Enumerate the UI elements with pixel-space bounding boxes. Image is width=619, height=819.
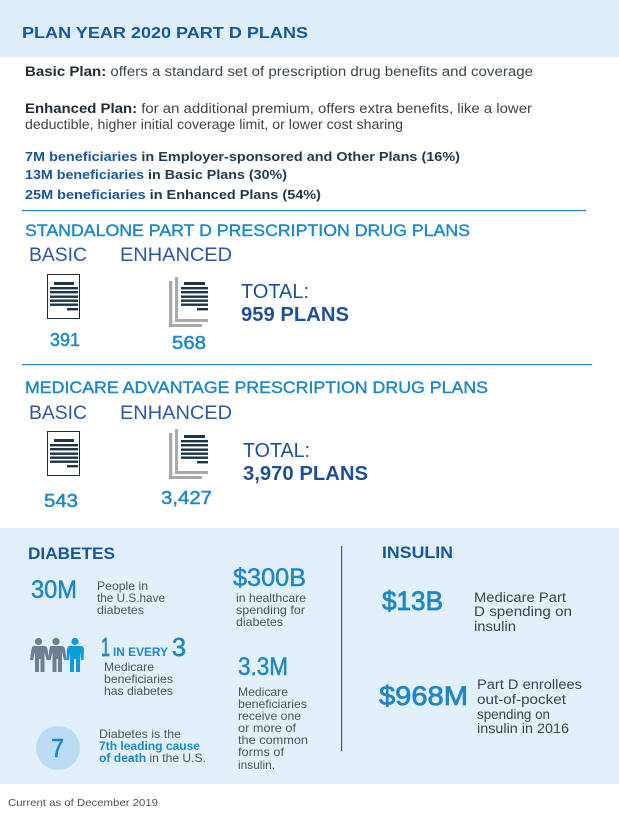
stat: 30M: 30M (31, 576, 77, 604)
text block: leading cause of death: Diabetes is the (99, 727, 181, 741)
stat: $968M: insulin in 2016 (477, 721, 569, 736)
panel: diabetes and insulin (0, 528, 619, 784)
text block: leading cause of death (99, 727, 206, 765)
stat: 3.3M: forms of (238, 745, 285, 759)
stat: 1 in every 3: IN EVERY (113, 647, 168, 659)
panel: standalone plans (25, 222, 470, 353)
icon: circled 7 (36, 726, 80, 770)
stat: 3.3M: beneficiaries (238, 697, 307, 711)
number: 391: 391 (50, 329, 80, 350)
stat: $300B: spending for (236, 603, 305, 617)
stat: 3.3M (238, 653, 308, 772)
label: basic: BASIC (29, 403, 87, 424)
stat: $13B: D spending on (474, 604, 572, 619)
text block: plan definitions: Enhanced Plan: for an additional premium, offers extra benefits, like a lower (25, 101, 533, 116)
label: enhanced: ENHANCED (120, 245, 232, 266)
stat: 30M (31, 576, 165, 617)
stat: 1 in every 3 (101, 632, 186, 698)
header band (0, 0, 619, 57)
stat: 3.3M: or more of (238, 721, 297, 735)
icon: circled 7: 7 (51, 733, 64, 763)
stat: 30M: the U.S.have (97, 591, 165, 605)
total: TOTAL: (241, 281, 309, 303)
label: basic: BASIC (29, 245, 87, 266)
stat: $968M: $968M (379, 681, 468, 711)
stat: $13B: insulin (474, 619, 516, 634)
icon: stacked documents (169, 277, 208, 327)
icon: stacked documents (169, 429, 208, 479)
stat: $968M: out-of-pocket (477, 692, 566, 707)
number: 568: 568 (172, 332, 206, 353)
heading: STANDALONE PART D PRESCRIPTION DRUG PLANS (25, 222, 470, 240)
stat: $300B (233, 564, 306, 629)
panel: medicare advantage plans (25, 379, 488, 511)
text block: beneficiaries: 7M beneficiaries in Employer-sponsored and Other Plans (16%) (25, 149, 460, 164)
stat: 1 in every 3: 1 (101, 632, 110, 662)
text block: beneficiaries (25, 149, 460, 202)
total (241, 281, 349, 326)
stat: 3.3M: insulin. (238, 758, 275, 772)
text block: leading cause of death: 7th leading cause (99, 739, 200, 753)
stat: 1 in every 3: Medicare (104, 660, 154, 674)
stat: 30M: diabetes (97, 603, 144, 617)
text block: plan definitions (25, 64, 533, 132)
stat: 1 in every 3: has diabetes (104, 684, 173, 698)
stat: $968M: spending on (477, 707, 550, 722)
stat: 1 in every 3: beneficiaries (104, 672, 173, 686)
text block: plan definitions: Basic Plan: offers a standard set of prescription drug benefits and coverage (25, 64, 533, 79)
text block: beneficiaries: 13M beneficiaries in Basic Plans (30%) (25, 167, 287, 182)
stat: $300B: in healthcare (236, 591, 306, 605)
stat: $968M (379, 677, 582, 736)
stat: 3.3M: receive one (238, 709, 301, 723)
title: PLAN YEAR 2020 PART D PLANS (22, 25, 308, 42)
stat: $13B: Medicare Part (474, 590, 566, 605)
stat: $300B: diabetes (236, 615, 283, 629)
total: 3,970 PLANS (243, 463, 368, 485)
number: 3,427: 3,427 (161, 487, 212, 508)
total (243, 440, 368, 485)
stat: 30M: People in (97, 579, 148, 593)
label: enhanced: ENHANCED (120, 403, 232, 424)
footer note: Current as of December 2019 (8, 797, 158, 809)
stat: $300B: $300B (233, 564, 306, 592)
stat: $13B: $13B (382, 586, 443, 616)
total: TOTAL: (243, 440, 310, 462)
heading: MEDICARE ADVANTAGE PRESCRIPTION DRUG PLANS (25, 379, 488, 397)
text block: leading cause of death: of death in the U.S. (99, 751, 206, 765)
stat: 1 in every 3: 3 (172, 632, 186, 662)
icon: single document (48, 274, 80, 318)
heading: diabetes: DIABETES (28, 545, 115, 563)
heading: insulin: INSULIN (382, 544, 453, 562)
icon: three people (30, 638, 84, 672)
stat: 3.3M: 3.3M (238, 653, 288, 681)
total: 959 PLANS (241, 304, 349, 326)
stat: 3.3M: the common (238, 733, 308, 747)
stat: 3.3M: Medicare (238, 685, 288, 699)
stat: $13B (382, 586, 572, 634)
text block: beneficiaries: 25M beneficiaries in Enhanced Plans (54%) (25, 187, 321, 202)
stat: $968M: Part D enrollees (477, 677, 582, 692)
number: 543: 543 (44, 490, 78, 511)
icon: single document (48, 432, 80, 476)
text block: plan definitions: deductible, higher initial coverage limit, or lower cost sharing (25, 117, 403, 132)
